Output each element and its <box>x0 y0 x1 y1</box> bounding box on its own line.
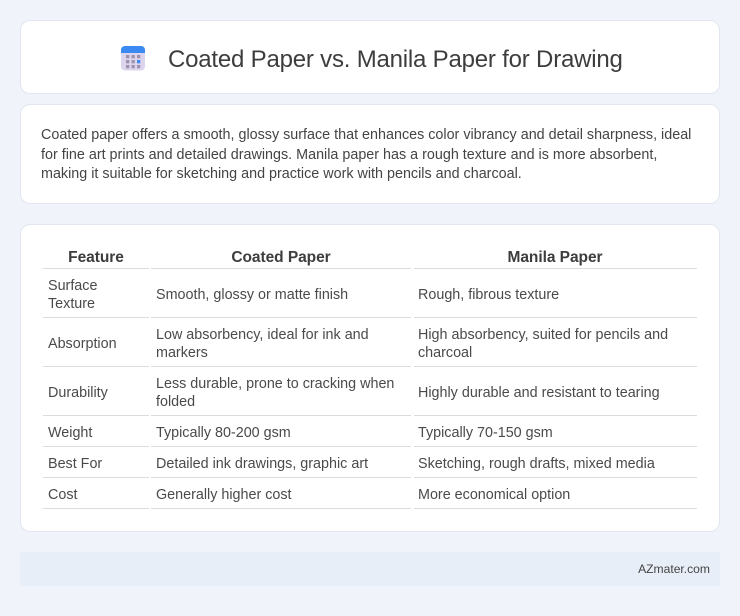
row: durability: Less durable, prone to cracking when <box>156 376 394 392</box>
intro text card <box>20 104 720 204</box>
intro paragraph: making it suitable for sketching and practice work with pencils and charcoal. <box>41 166 522 182</box>
row: best for: Best For <box>48 456 102 472</box>
intro paragraph: Coated paper offers a smooth, glossy surface that enhances color vibrancy and detail sharpness, ideal <box>41 127 691 143</box>
column headers: Feature <box>68 249 124 266</box>
row: weight: Weight <box>48 425 92 441</box>
row: best for: Sketching, rough drafts, mixed media <box>418 456 655 472</box>
row: cost: Cost <box>48 487 78 503</box>
row: absorption: charcoal <box>418 345 472 361</box>
title: Coated Paper vs. Manila Paper for Drawing <box>168 46 623 73</box>
row: absorption: High absorbency, suited for pencils and <box>418 327 668 343</box>
row: absorption: Absorption <box>48 336 117 352</box>
row: surface texture: Surface <box>48 278 97 294</box>
title card <box>20 20 720 94</box>
intro paragraph <box>41 127 691 182</box>
column headers <box>68 249 603 266</box>
row: surface texture <box>43 268 697 312</box>
intro paragraph: for fine art prints and detailed drawings. Manila paper has a rough texture and is more absorbent, <box>41 147 657 163</box>
row: weight: Typically 80-200 gsm <box>156 425 291 441</box>
row: durability: Highly durable and resistant to tearing <box>418 385 660 401</box>
row: durability <box>43 366 697 410</box>
column headers: Manila Paper <box>507 249 603 266</box>
row: absorption: Low absorbency, ideal for ink and <box>156 327 369 343</box>
footer bar <box>20 552 720 586</box>
row: surface texture: Rough, fibrous texture <box>418 287 559 303</box>
row: absorption <box>43 317 697 361</box>
footer credit: AZmater.com <box>638 562 710 576</box>
comparison table card <box>20 224 720 532</box>
row: absorption: markers <box>156 345 208 361</box>
row: best for: Detailed ink drawings, graphic art <box>156 456 368 472</box>
row: cost <box>43 477 697 509</box>
icon: calendar <box>121 46 145 70</box>
row: weight <box>43 415 697 441</box>
row: durability: folded <box>156 394 195 410</box>
column headers: Coated Paper <box>231 249 331 266</box>
row: best for <box>43 446 697 472</box>
row: surface texture: Smooth, glossy or matte finish <box>156 287 348 303</box>
row: weight: Typically 70-150 gsm <box>418 425 553 441</box>
row: cost: Generally higher cost <box>156 487 292 503</box>
row: durability: Durability <box>48 385 108 401</box>
row: cost: More economical option <box>418 487 570 503</box>
row: surface texture: Texture <box>48 296 95 312</box>
